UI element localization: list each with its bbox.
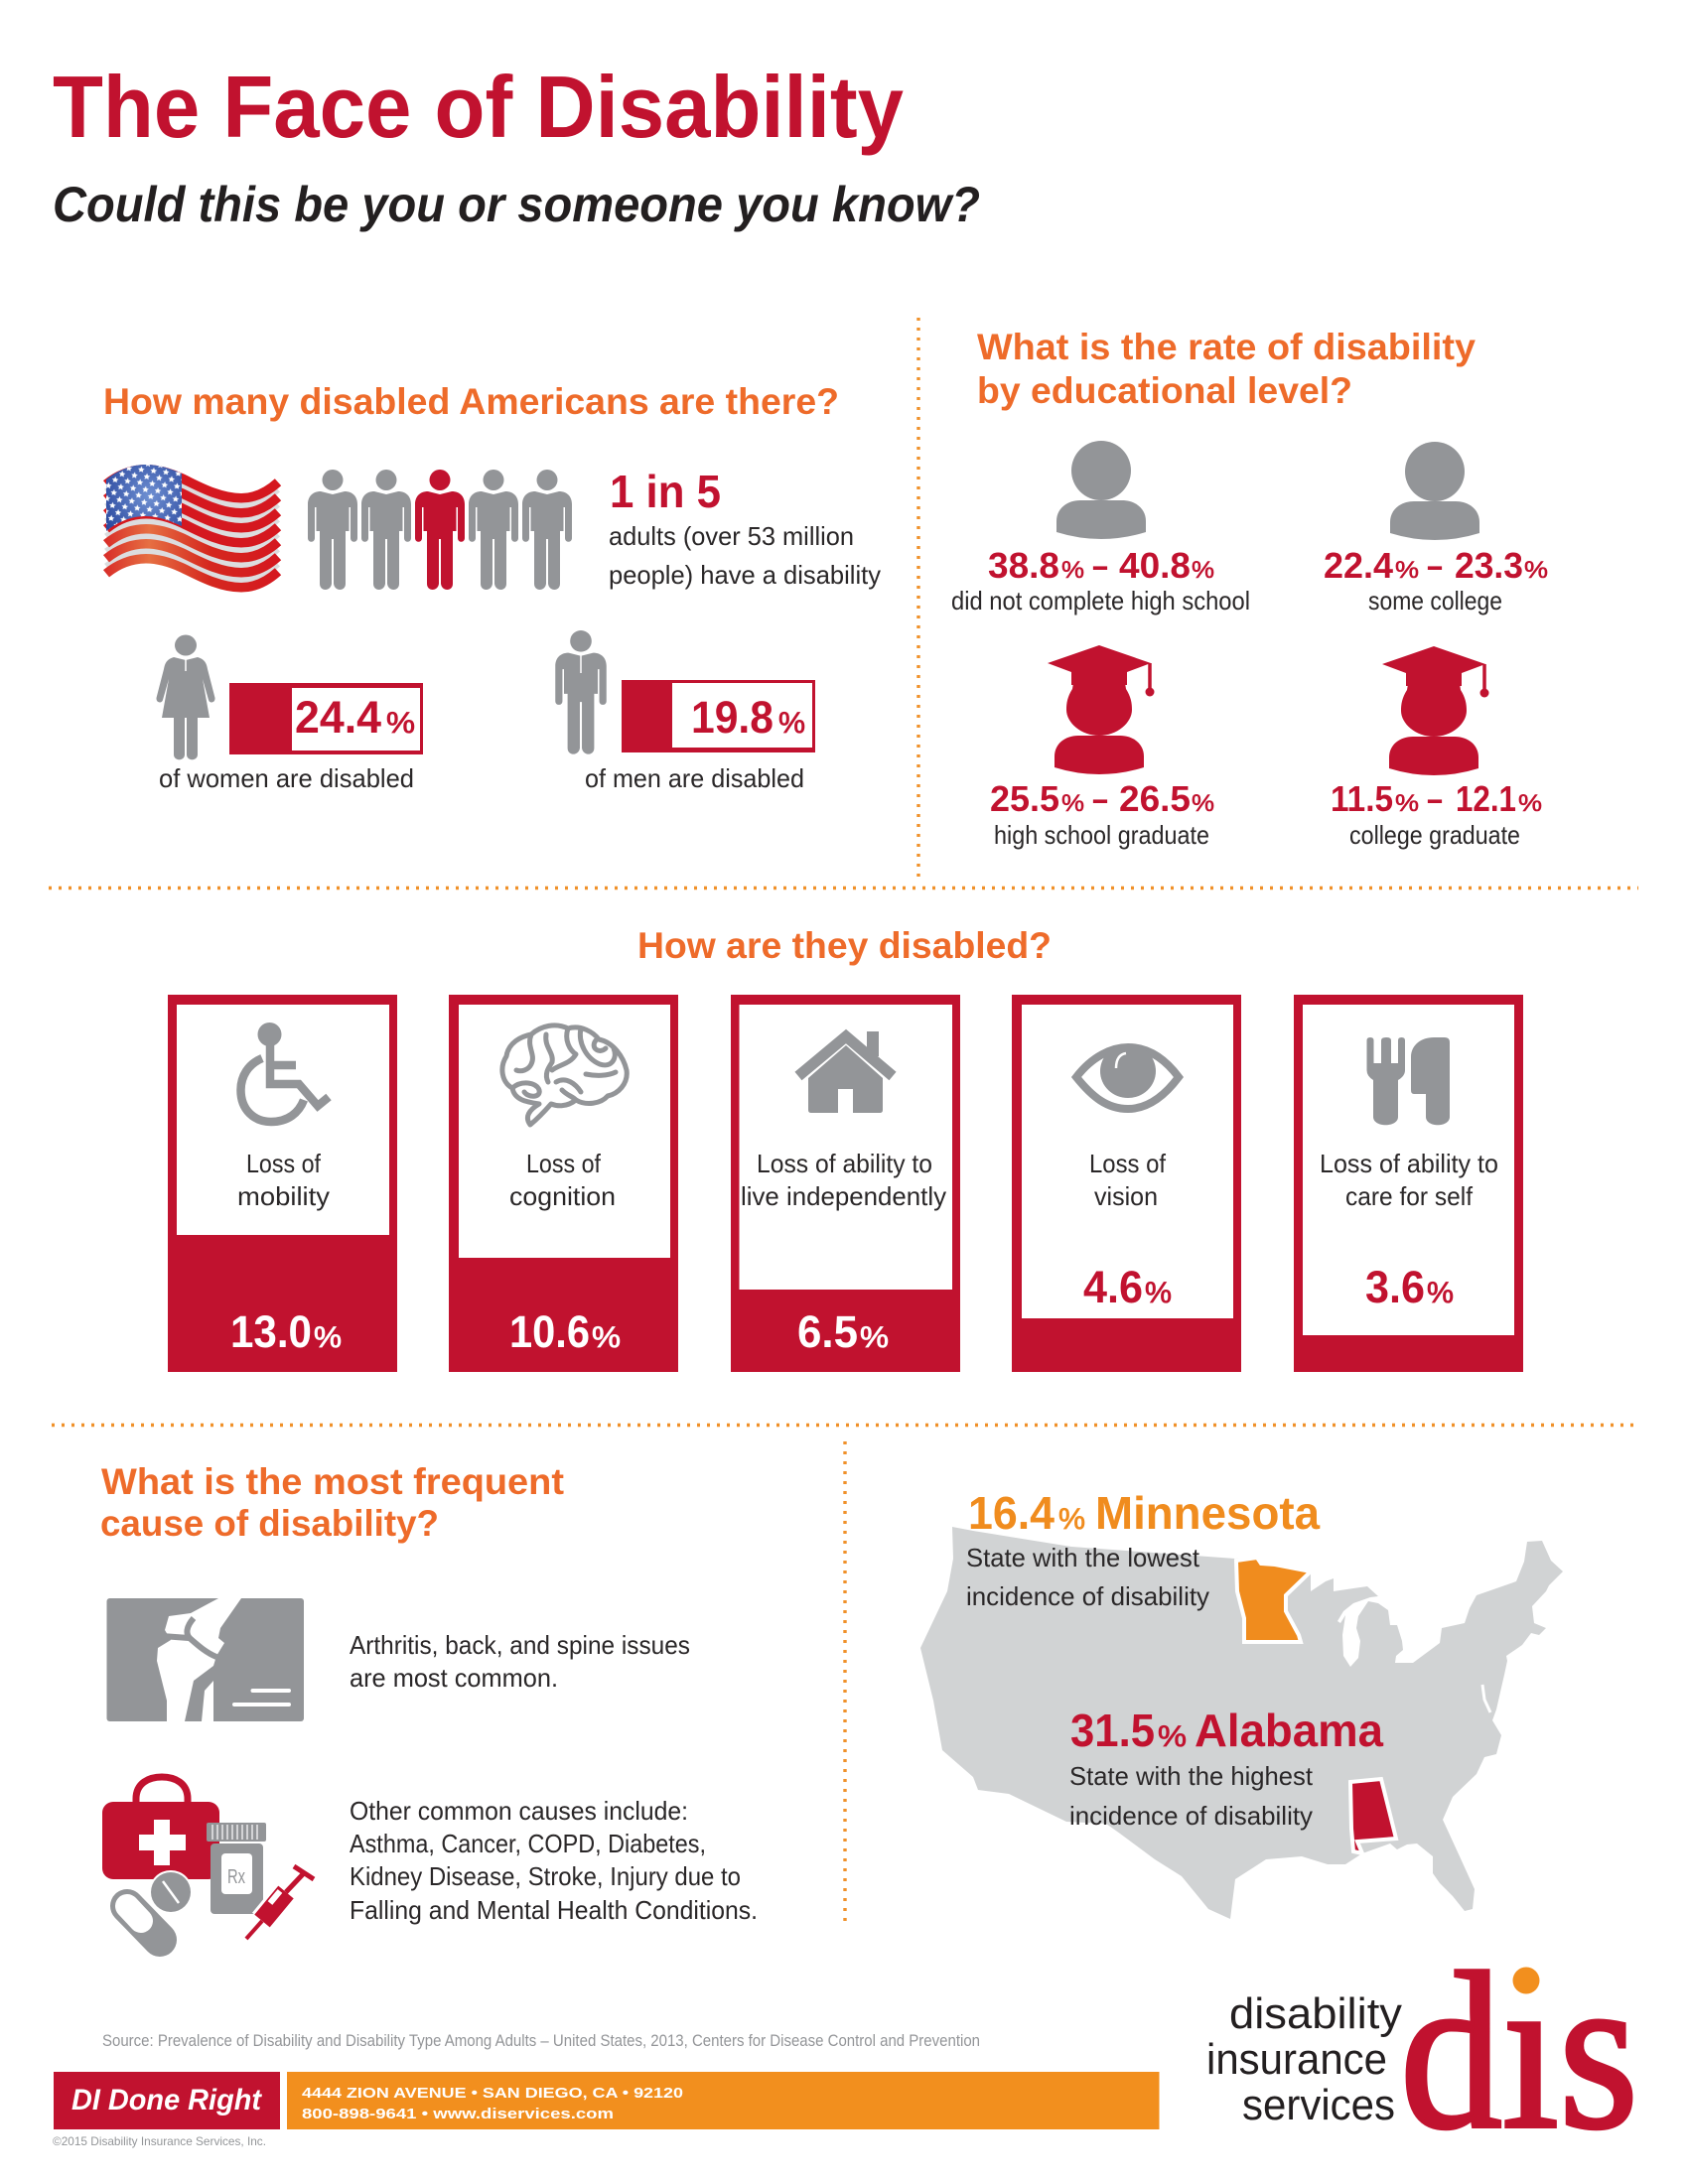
text: other common causes: Kidney Disease, Stroke, Injury due to xyxy=(350,1861,741,1891)
card: loss of cognition: cognition xyxy=(509,1181,616,1211)
icon: American flag xyxy=(106,465,278,588)
subtitle: Could this be you or someone you know? xyxy=(53,177,980,232)
callout: Alabama xyxy=(1069,1705,1383,1831)
logo: disability insurance services: dis xyxy=(1400,1927,1638,2175)
stat: some college: 23.3 xyxy=(1455,545,1523,586)
callout: Alabama: % xyxy=(1158,1720,1187,1753)
callout: Alabama: Alabama xyxy=(1195,1705,1383,1756)
stat: did not complete high school xyxy=(951,545,1250,615)
heading: most frequent cause: What is the most frequent xyxy=(101,1461,564,1502)
stat: high school graduate: 25.5 xyxy=(990,778,1059,819)
card: loss of cognition: 10.6 xyxy=(509,1306,590,1357)
heading: most frequent cause xyxy=(100,1461,564,1544)
text: arthritis: Arthritis, back, and spine issues xyxy=(350,1630,690,1660)
source note: Source: Prevalence of Disability and Disability Type Among Adults – United States, 2013, Centers for Disease Control and Prevention xyxy=(102,2031,980,2050)
stat: high school graduate: 26.5 xyxy=(1119,778,1191,819)
text: other common causes: Other common causes include: xyxy=(350,1796,688,1826)
stat: high school graduate: % xyxy=(1061,790,1084,817)
bar: men 19.8 percent: 19.8 xyxy=(691,692,774,743)
bar: men 19.8 percent xyxy=(622,680,815,752)
icon: five people, one highlighted xyxy=(308,470,572,590)
callout: Minnesota: Minnesota xyxy=(1095,1487,1320,1539)
stat: high school graduate xyxy=(990,778,1214,850)
stat: 1 in 5 xyxy=(609,466,881,590)
heading: how are they disabled: How are they disabled? xyxy=(637,925,1052,966)
icon: medical kit, pills and syringe xyxy=(102,1777,314,1940)
card: loss of mobility xyxy=(168,995,397,1372)
stat: high school graduate: high school graduate xyxy=(994,820,1209,850)
footer: contact bar: 4444 ZION AVENUE • SAN DIEGO, CA • 92120 xyxy=(302,2085,683,2102)
stat: some college: – xyxy=(1427,545,1443,586)
card: loss of ability to care for self: Loss of ability to xyxy=(1320,1149,1498,1178)
footer: contact bar: 800-898-9641 • www.diservices.com xyxy=(302,2106,614,2122)
icon: woman xyxy=(156,635,215,759)
bar: women 24.4 percent: 24.4 xyxy=(295,692,381,743)
text: arthritis: are most common. xyxy=(350,1663,558,1693)
card: loss of ability to care for self: care for self xyxy=(1345,1181,1474,1211)
icon: graduate, college xyxy=(1382,646,1489,775)
stat: did not complete high school: did not complete high school xyxy=(951,586,1250,615)
stat: did not complete high school: 38.8 xyxy=(988,545,1059,586)
callout: Minnesota: % xyxy=(1058,1503,1085,1536)
callout: Minnesota xyxy=(966,1487,1320,1611)
logo: disability insurance services: disability xyxy=(1229,1989,1402,2038)
stat: college graduate xyxy=(1331,778,1542,850)
card: loss of mobility: 13.0 xyxy=(230,1306,312,1357)
stat: college graduate: 11.5 xyxy=(1331,778,1393,819)
callout: Minnesota: 16.4 xyxy=(968,1487,1055,1539)
stat: 1 in 5: 1 in 5 xyxy=(610,466,721,517)
bar: women 24.4 percent: % xyxy=(386,707,415,740)
stat: 1 in 5: people) have a disability xyxy=(609,560,881,590)
map: continental United States xyxy=(920,1527,1563,1919)
stat: some college xyxy=(1324,545,1548,615)
card: loss of ability to care for self: % xyxy=(1427,1277,1454,1309)
copyright: ©2015 Disability Insurance Services, Inc. xyxy=(53,2134,266,2148)
icon: brain xyxy=(502,1025,627,1125)
icon: knee x-ray xyxy=(107,1598,304,1721)
stat: college graduate: – xyxy=(1427,778,1443,819)
heading: education: What is the rate of disability xyxy=(977,327,1476,367)
callout: Minnesota: incidence of disability xyxy=(966,1581,1209,1611)
stat: college graduate: % xyxy=(1518,790,1542,817)
card: loss of vision: % xyxy=(1145,1277,1172,1309)
stat: did not complete high school: % xyxy=(1192,557,1214,584)
card: loss of cognition: % xyxy=(592,1321,621,1354)
stat: high school graduate: % xyxy=(1192,790,1214,817)
footer: contact bar xyxy=(287,2072,1160,2129)
stat: college graduate: % xyxy=(1395,790,1419,817)
card: loss of mobility: mobility xyxy=(237,1181,330,1211)
stat: did not complete high school: – xyxy=(1092,545,1108,586)
logo: disability insurance services: services xyxy=(1242,2081,1395,2129)
state: Alabama xyxy=(1350,1779,1396,1853)
icon: wheelchair xyxy=(240,1023,329,1122)
icon: person, no diploma xyxy=(1056,441,1146,539)
callout: Minnesota: State with the lowest xyxy=(966,1543,1200,1572)
card: loss of ability to care for self xyxy=(1294,995,1523,1372)
text: other common causes xyxy=(350,1796,758,1925)
footer: DI Done Right tag xyxy=(54,2072,280,2129)
icon: eye xyxy=(1076,1044,1179,1109)
card: loss of ability to live independently xyxy=(731,995,960,1372)
stat: some college: some college xyxy=(1368,586,1502,615)
card: loss of vision xyxy=(1012,995,1241,1372)
card: loss of mobility: % xyxy=(314,1321,342,1354)
card: loss of ability to live independently: live independently xyxy=(741,1181,946,1211)
icon: graduate, high school xyxy=(1048,645,1154,774)
stat: did not complete high school: 40.8 xyxy=(1119,545,1191,586)
state: Minnesota xyxy=(1236,1558,1311,1642)
panel: how are they disabled xyxy=(168,925,1523,1372)
card: loss of cognition: Loss of xyxy=(526,1149,602,1178)
icon: person, some college xyxy=(1390,442,1479,540)
stat: some college: % xyxy=(1524,557,1548,584)
stat: did not complete high school: % xyxy=(1061,557,1084,584)
heading: education: by educational level? xyxy=(977,370,1352,411)
title: The Face of Disability xyxy=(53,58,904,156)
card: loss of mobility: Loss of xyxy=(246,1149,322,1178)
card: loss of vision: Loss of xyxy=(1089,1149,1167,1178)
callout: Alabama: 31.5 xyxy=(1070,1705,1155,1756)
callout: Alabama: State with the highest xyxy=(1069,1761,1314,1791)
icon: medical kit, pills and syringe: Rx xyxy=(227,1866,245,1888)
card: loss of vision: 4.6 xyxy=(1083,1262,1143,1312)
panel: US map xyxy=(920,1487,1563,1919)
bar: men 19.8 percent: % xyxy=(778,707,805,740)
card: loss of ability to care for self: 3.6 xyxy=(1365,1262,1425,1312)
heading: how many: How many disabled Americans are there? xyxy=(103,381,839,422)
bar: women 24.4 percent xyxy=(229,683,423,754)
stat: some college: % xyxy=(1395,557,1419,584)
label: men: of men are disabled xyxy=(585,763,804,793)
footer: DI Done Right tag: DI Done Right xyxy=(71,2084,263,2116)
card: loss of ability to live independently: % xyxy=(860,1321,889,1354)
icon: man xyxy=(555,630,607,754)
card: loss of vision: vision xyxy=(1094,1181,1158,1211)
stat: some college: 22.4 xyxy=(1324,545,1393,586)
logo: disability insurance services: insurance xyxy=(1206,2035,1387,2084)
label: women: of women are disabled xyxy=(159,763,414,793)
card: loss of ability to live independently: 6.5 xyxy=(797,1306,858,1357)
stat: high school graduate: – xyxy=(1092,778,1108,819)
text: other common causes: Falling and Mental Health Conditions. xyxy=(350,1895,758,1925)
panel: rate by educational level xyxy=(951,327,1548,850)
stat: college graduate: 12.1 xyxy=(1456,778,1516,819)
callout: Alabama: incidence of disability xyxy=(1069,1801,1313,1831)
heading: most frequent cause: cause of disability? xyxy=(100,1503,439,1544)
icon: house xyxy=(798,1031,893,1113)
heading: education xyxy=(977,327,1476,411)
panel: how many disabled Americans xyxy=(103,381,881,793)
icon: fork and knife xyxy=(1366,1037,1450,1125)
card: loss of cognition xyxy=(449,995,678,1372)
logo: disability insurance services xyxy=(1206,1927,1638,2175)
text: arthritis xyxy=(350,1630,690,1693)
stat: college graduate: college graduate xyxy=(1349,820,1520,850)
text: other common causes: Asthma, Cancer, COPD, Diabetes, xyxy=(350,1829,706,1858)
stat: 1 in 5: adults (over 53 million xyxy=(609,521,854,551)
card: loss of ability to live independently: Loss of ability to xyxy=(757,1149,932,1178)
panel: most frequent cause xyxy=(100,1461,758,1940)
